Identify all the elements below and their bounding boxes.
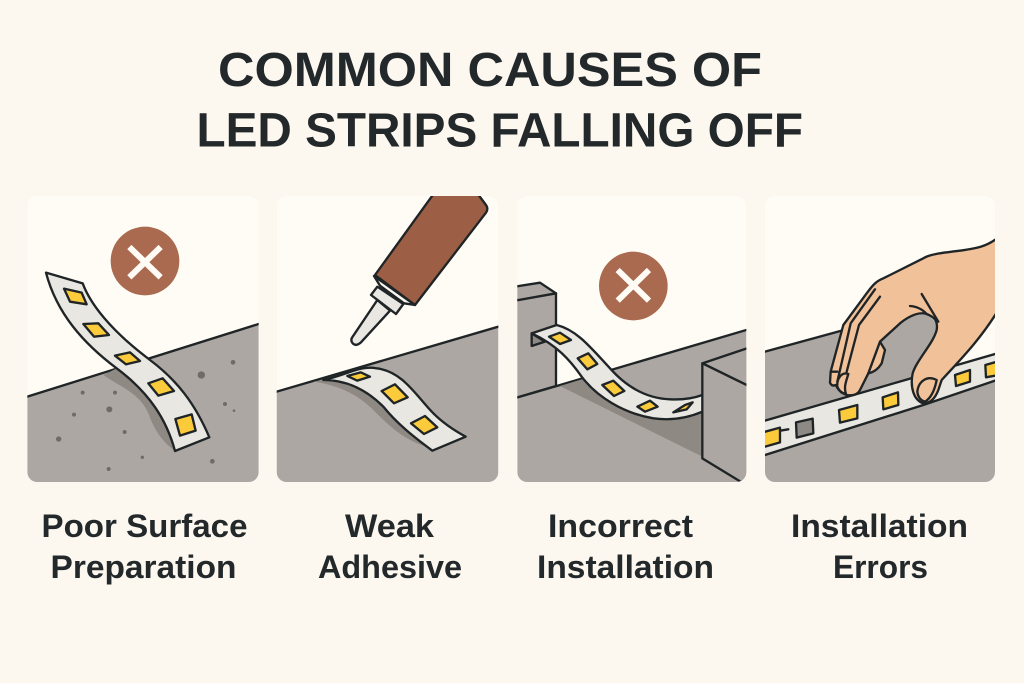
LED strip bridging gap: [532, 325, 702, 419]
panel: weak adhesive: [277, 193, 498, 482]
panel: installation errors: [765, 238, 995, 482]
title: LED STRIPS FALLING OFF: [196, 104, 803, 158]
icon: x mark: [111, 227, 179, 295]
left block: [515, 283, 556, 398]
label: installation errors: Installation: [791, 508, 968, 544]
label: installation errors: [791, 508, 968, 585]
icon: x mark: [599, 252, 668, 320]
title: [196, 43, 803, 158]
label: poor surface preparation: [42, 508, 248, 585]
label: weak adhesive: [318, 508, 462, 585]
panel: incorrect installation: [517, 252, 746, 482]
label: incorrect installation: [537, 508, 714, 585]
peeling LED strip: [46, 273, 209, 451]
icon: hand: [830, 237, 998, 403]
right block: [702, 347, 750, 483]
label: incorrect installation: Incorrect: [548, 508, 693, 544]
LED strip: [762, 354, 998, 455]
label: weak adhesive: Weak: [345, 508, 434, 544]
label: installation errors: Errors: [833, 549, 928, 585]
label: weak adhesive: Adhesive: [318, 549, 462, 585]
label: incorrect installation: Installation: [537, 549, 714, 585]
panel: poor surface preparation: [27, 226, 259, 482]
title: COMMON CAUSES OF: [218, 43, 762, 97]
label: poor surface preparation: Preparation: [50, 549, 236, 585]
label: poor surface preparation: Poor Surface: [42, 508, 248, 544]
LED strip on surface: [323, 368, 466, 451]
icon: adhesive tube: [351, 193, 487, 345]
